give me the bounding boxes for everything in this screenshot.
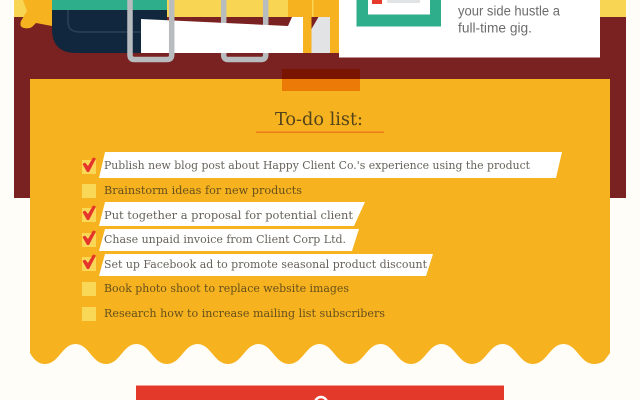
- panel: red footer box: [136, 386, 504, 400]
- green stripe: [52, 0, 167, 10]
- paper clip right: [224, 0, 266, 60]
- heading: To-do list:: [275, 110, 363, 130]
- tab: [282, 69, 360, 91]
- white paper: [141, 17, 303, 53]
- grey sheet: [312, 17, 330, 53]
- icon: green framed document: [356, 0, 441, 26]
- tablet inner line: [68, 10, 141, 32]
- item 3: [82, 202, 365, 226]
- item 1: [82, 152, 562, 178]
- item 4: Chase unpaid invoice from Client Corp Ltd.: [104, 233, 346, 246]
- text block: your side hustle a: [458, 4, 560, 18]
- item 2: Brainstorm ideas for new products: [104, 184, 302, 197]
- item 5: Set up Facebook ad to promote seasonal product discount: [104, 258, 428, 271]
- text block: full-time gig.: [458, 20, 532, 36]
- icon: orange star: [20, 0, 52, 28]
- paper clip left: [130, 0, 172, 60]
- item 5: [82, 254, 433, 276]
- navy tablet: [52, 10, 167, 53]
- item 1: Publish new blog post about Happy Client Co.'s experience using the product: [104, 159, 531, 172]
- panel: white text card: [339, 0, 600, 58]
- item 4: [82, 229, 359, 251]
- panel: to-do list: [30, 69, 610, 364]
- item 6: Book photo shoot to replace website images: [104, 282, 349, 295]
- orange top band: [312, 0, 339, 53]
- item 7: Research how to increase mailing list subscribers: [104, 307, 385, 320]
- item 3: Put together a proposal for potential client: [104, 209, 354, 222]
- illustration: desk with paper and clips: [20, 0, 339, 60]
- orange strip: [288, 0, 312, 53]
- maroon background panel: [14, 0, 626, 198]
- text block: [458, 4, 560, 36]
